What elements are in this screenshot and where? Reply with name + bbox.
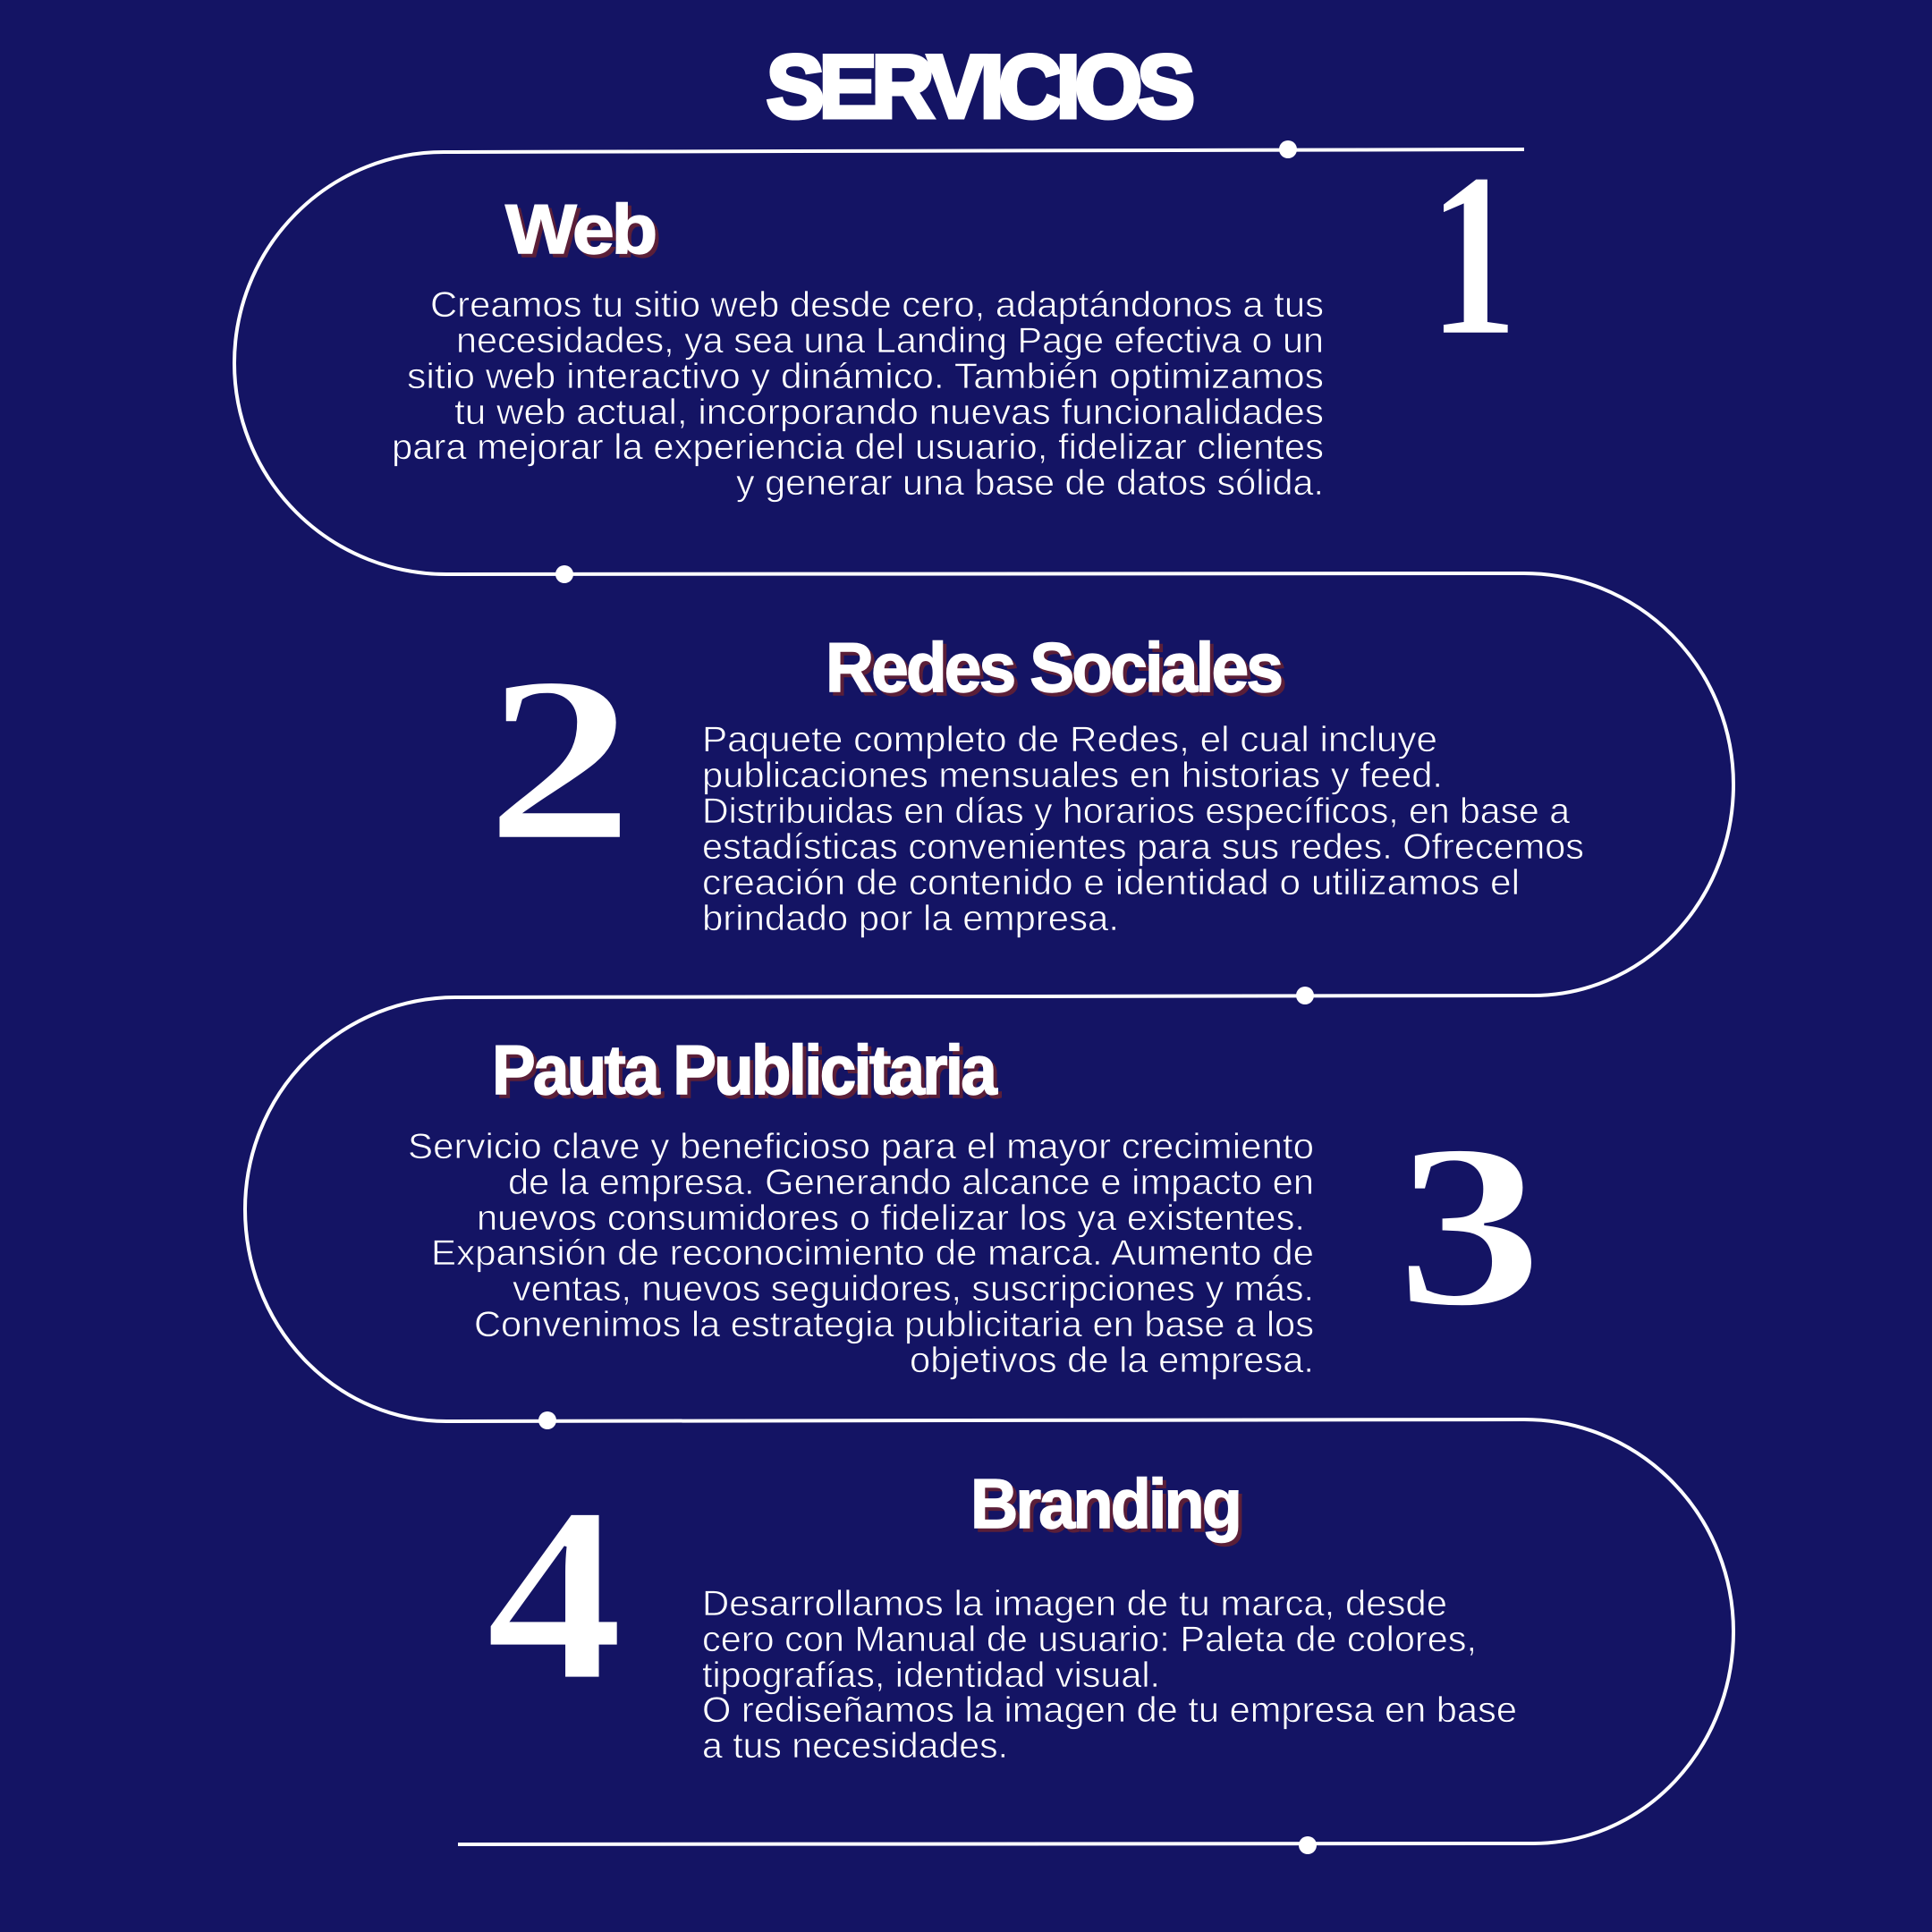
body text: pauta publicitaria: nuevos consumidores o fidelizar los ya existentes.: [477, 1199, 1305, 1238]
panel: pauta publicitaria: [245, 997, 1543, 1429]
heading: pauta publicitaria: Pauta Publicitaria: [496, 1034, 1001, 1113]
number 2: 2: [486, 628, 634, 889]
number 3: 3: [1396, 1097, 1543, 1354]
body text: web: y generar una base de datos sólida.: [736, 463, 1324, 503]
heading: web: Web: [509, 193, 658, 272]
body text: pauta publicitaria: Servicio clave y beneficioso para el mayor crecimiento: [408, 1127, 1314, 1166]
connector curve 2: [446, 573, 1733, 997]
heading: branding: Branding: [974, 1468, 1243, 1546]
node dot 4: [538, 1411, 556, 1429]
heading: web: Web: [505, 190, 655, 268]
body text: web: tu web actual, incorporando nuevas funcionalidades: [454, 393, 1324, 432]
body text: branding: [702, 1584, 1517, 1766]
body text: web: sitio web interactivo y dinámico. También optimizamos: [407, 357, 1324, 396]
heading: redes sociales: Redes Sociales: [826, 628, 1282, 707]
body text: web: necesidades, ya sea una Landing Page efectiva o un: [456, 321, 1324, 360]
body text: branding: a tus necesidades.: [702, 1726, 1008, 1766]
heading: pauta publicitaria: Pauta Publicitaria: [492, 1030, 997, 1109]
body text: branding: O rediseñamos la imagen de tu empresa en base: [702, 1690, 1517, 1730]
node dot 2: [555, 565, 573, 583]
title: SERVICIOS: [767, 37, 1192, 136]
panel: redes sociales: [446, 565, 1733, 1004]
body text: pauta publicitaria: [408, 1127, 1314, 1380]
body text: redes sociales: creación de contenido e identidad o utilizamos el: [702, 863, 1520, 902]
number 4: 4: [486, 1455, 623, 1733]
body text: pauta publicitaria: ventas, nuevos seguidores, suscripciones y más.: [513, 1269, 1314, 1309]
node dot 3: [1296, 987, 1314, 1004]
body text: web: Creamos tu sitio web desde cero, adaptándonos a tus: [430, 285, 1324, 325]
body text: branding: Desarrollamos la imagen de tu marca, desde: [702, 1584, 1447, 1623]
body text: pauta publicitaria: objetivos de la empresa.: [910, 1341, 1314, 1380]
body text: redes sociales: estadísticas convenientes para sus redes. Ofrecemos: [702, 827, 1584, 867]
body text: pauta publicitaria: Convenimos la estrategia publicitaria en base a los: [474, 1305, 1314, 1344]
panel: branding: [446, 1419, 1733, 1854]
connector curve 4: [446, 1419, 1733, 1844]
body text: redes sociales: Distribuidas en días y horarios específicos, en base a: [702, 792, 1571, 831]
heading: branding: Branding: [970, 1464, 1240, 1543]
body text: redes sociales: Paquete completo de Redes, el cual incluye: [702, 720, 1437, 759]
body text: web: para mejorar la experiencia del usuario, fidelizar clientes: [392, 428, 1324, 467]
panel: web: [234, 124, 1524, 574]
body text: redes sociales: publicaciones mensuales en historias y feed.: [702, 756, 1443, 795]
body text: redes sociales: [702, 720, 1584, 938]
body text: pauta publicitaria: de la empresa. Generando alcance e impacto en: [508, 1163, 1314, 1202]
heading: redes sociales: Redes Sociales: [829, 631, 1285, 710]
connector curve 1: [234, 149, 1524, 574]
body text: web: [392, 285, 1324, 503]
body text: branding: tipografías, identidad visual.: [702, 1656, 1160, 1695]
body text: branding: cero con Manual de usuario: Paleta de colores,: [702, 1620, 1477, 1659]
connector curve 3: [245, 997, 456, 1421]
body text: pauta publicitaria: Expansión de reconocimiento de marca. Aumento de: [431, 1233, 1314, 1273]
body text: redes sociales: brindado por la empresa.: [702, 899, 1119, 938]
node dot 5: [1299, 1836, 1317, 1854]
node dot 1: [1279, 140, 1297, 158]
number 1: 1: [1428, 124, 1518, 385]
